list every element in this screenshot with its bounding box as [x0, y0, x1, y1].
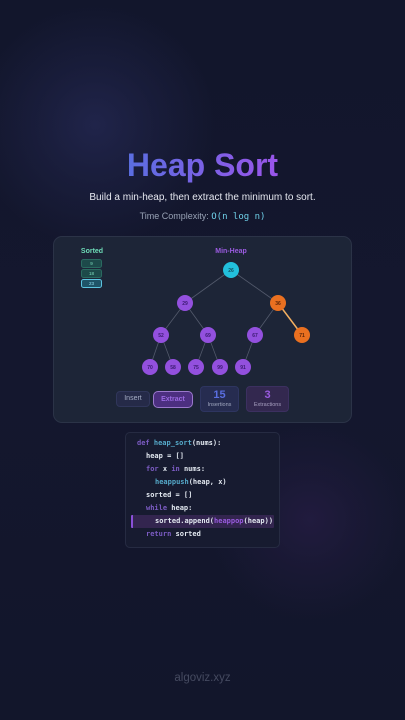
tree diagram: 71 — [299, 333, 305, 339]
title: Heap Sort — [127, 147, 278, 183]
code block: sorted.append(heappop(heap)) — [155, 517, 273, 525]
code block: while heap: — [146, 504, 192, 512]
code block: sorted = [] — [146, 491, 192, 499]
code block: heap = [] — [146, 452, 184, 460]
insert button — [116, 391, 150, 407]
insert button: Insert — [124, 395, 142, 402]
panel: visualization — [53, 236, 352, 423]
stat: extractions: 3 — [264, 389, 271, 401]
stat: extractions — [246, 386, 289, 412]
stat: insertions — [200, 386, 239, 412]
subtitle: Build a min-heap, then extract the minimum to sort. — [89, 192, 316, 203]
footer: algoviz.xyz — [174, 672, 231, 684]
code block: for x in nums: — [146, 465, 205, 473]
highlighted code line — [131, 515, 274, 528]
tree diagram: 67 — [252, 333, 258, 339]
tree diagram: 75 — [193, 365, 199, 371]
tree diagram: 70 — [147, 365, 153, 371]
tree diagram: 36 — [275, 301, 281, 307]
stat: insertions: 15 — [213, 389, 226, 401]
code block — [137, 439, 273, 538]
text: 18 — [89, 271, 94, 276]
tree diagram: 69 — [205, 333, 211, 339]
panel: code — [125, 432, 280, 548]
text: 23 — [89, 281, 94, 286]
min-heap heading: Min-Heap — [215, 248, 247, 255]
extract button — [153, 391, 193, 408]
time complexity: Time Complexity: O(n log n) — [140, 211, 265, 222]
code block: heappush(heap, x) — [155, 478, 227, 486]
tree diagram: 29 — [182, 301, 188, 307]
tree diagram: 58 — [170, 365, 176, 371]
text: 9 — [90, 261, 93, 266]
sorted heading: Sorted — [81, 248, 103, 255]
code block: return sorted — [146, 530, 201, 538]
stat: extractions: Extractions — [254, 402, 281, 408]
stat: insertions: Insertions — [208, 402, 231, 408]
extract button: Extract — [161, 396, 185, 403]
tree diagram: 91 — [240, 365, 246, 371]
tree diagram: 52 — [158, 333, 164, 339]
sorted list — [81, 259, 102, 288]
code block: def heap_sort(nums): — [137, 439, 221, 447]
tree diagram: 26 — [228, 268, 234, 274]
tree diagram: 99 — [217, 365, 223, 371]
